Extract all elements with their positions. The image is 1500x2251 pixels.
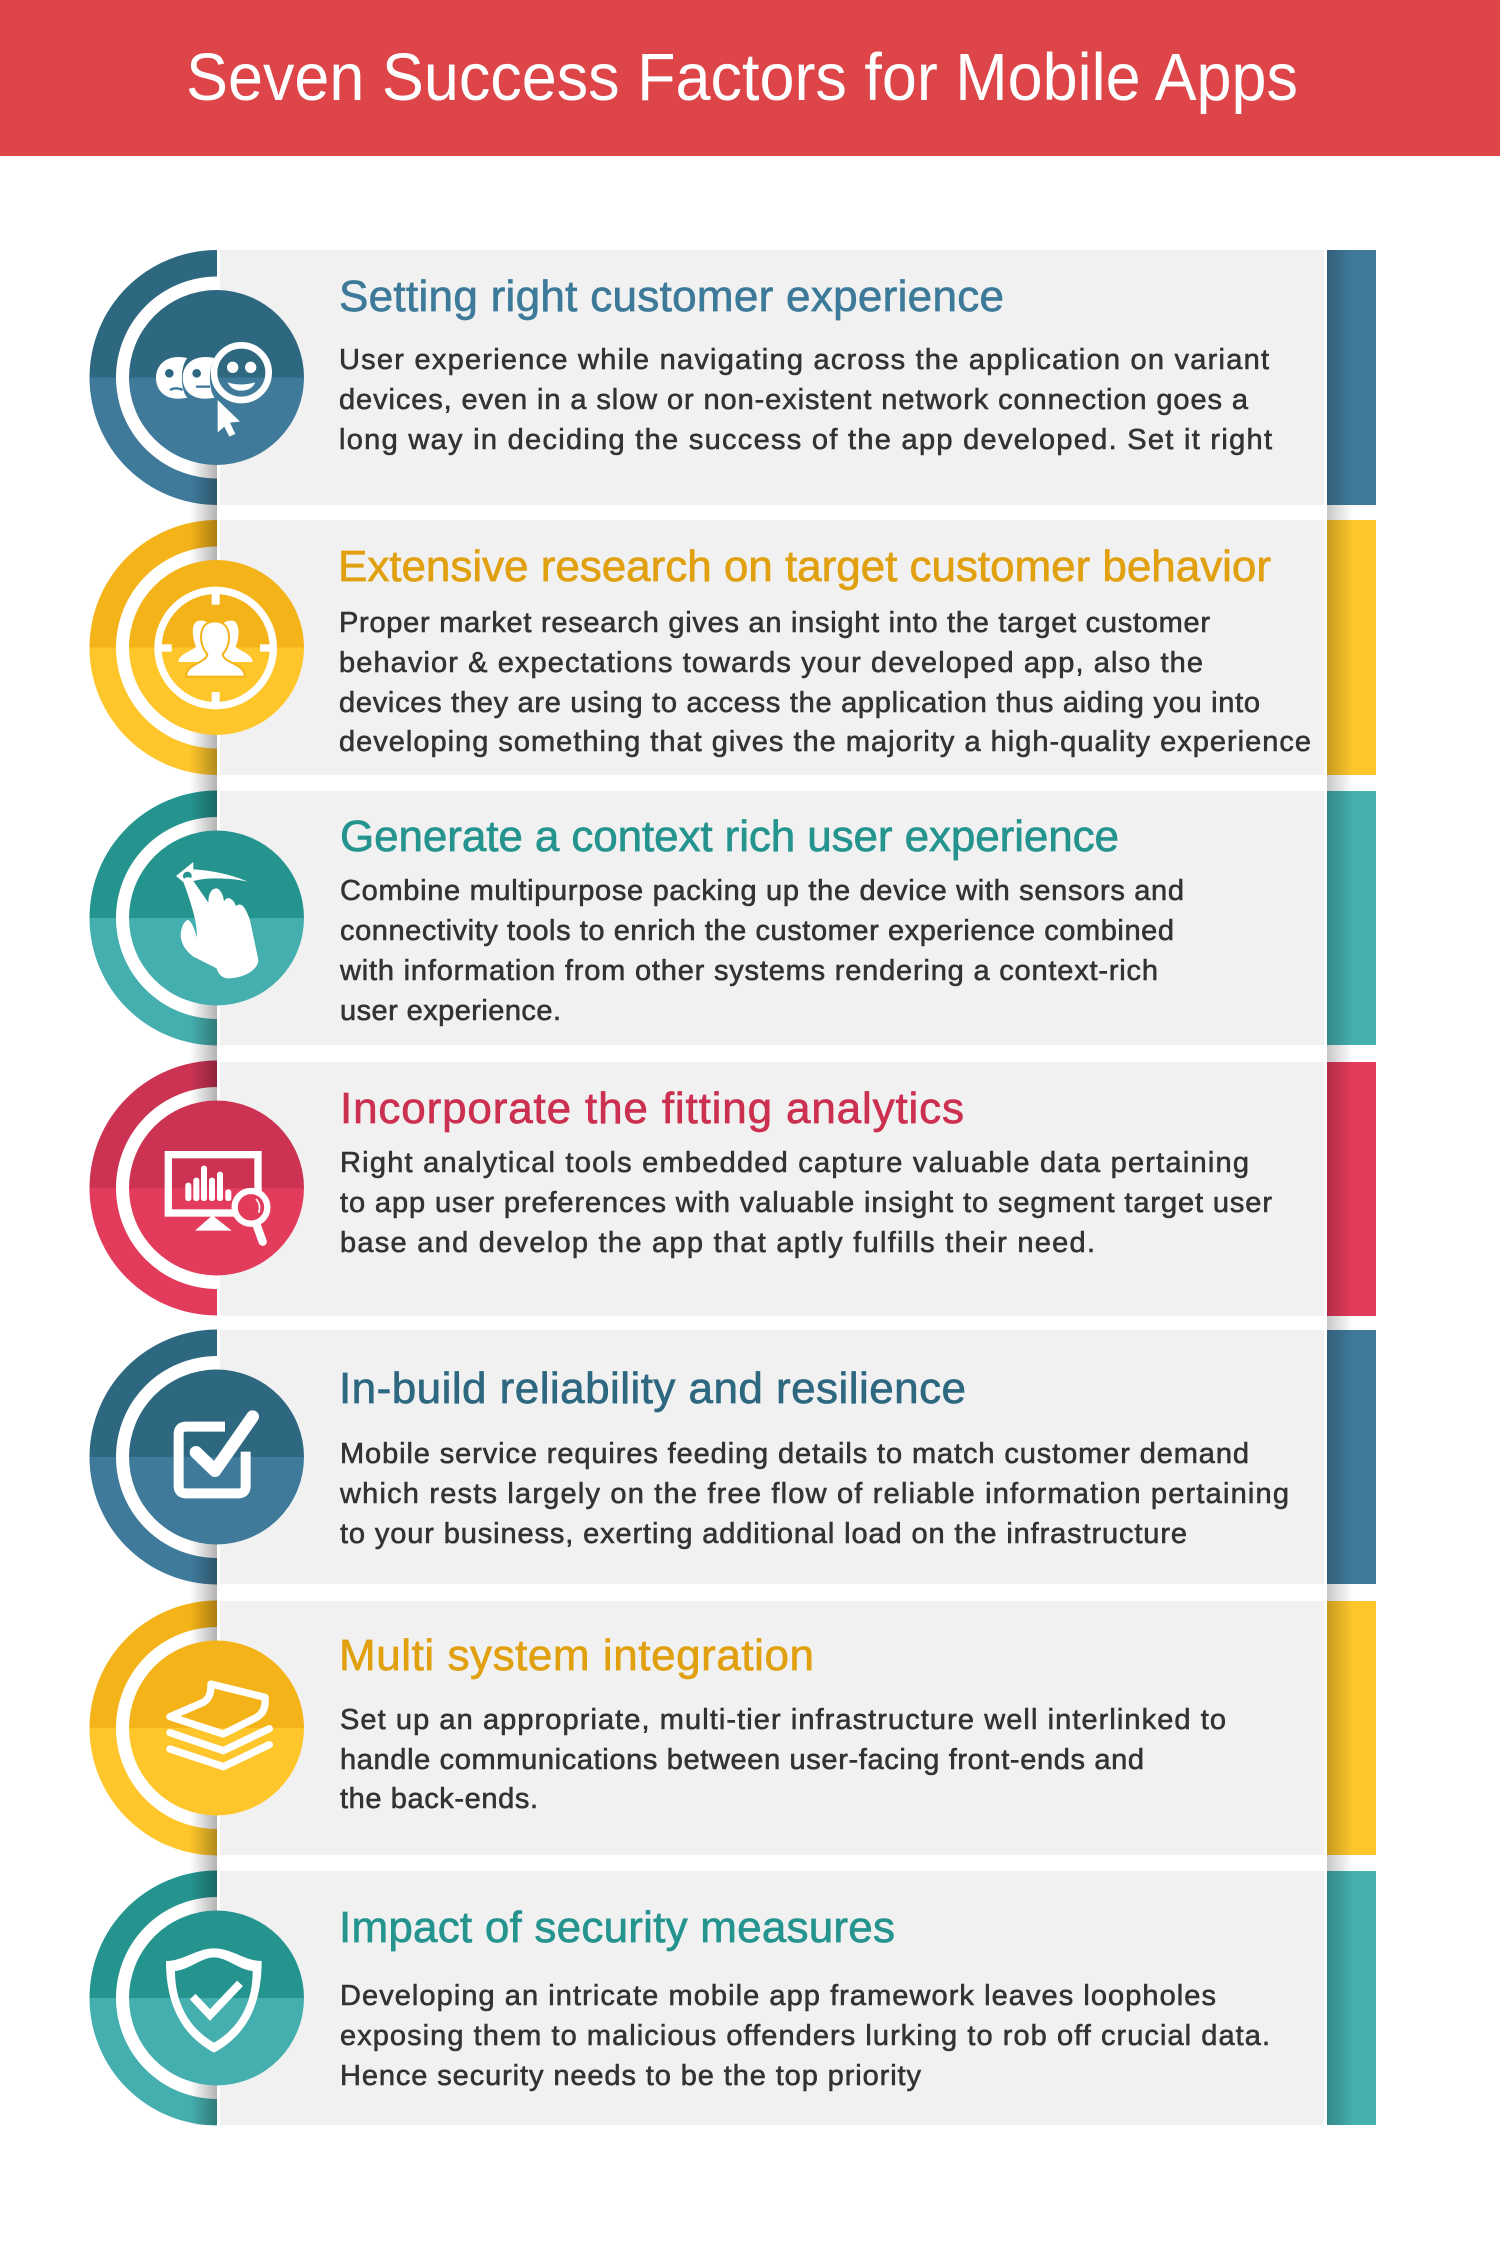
heading: Impact of security measures (339, 1903, 895, 1952)
accent bar (1327, 1062, 1376, 1316)
description: Right analytical tools embedded capture valuable data pertaining (340, 1147, 1249, 1179)
ring (90, 1870, 217, 2126)
icon: swipe hand (129, 831, 304, 1005)
description: User experience while navigating across the application on variant (339, 344, 1269, 376)
description: connectivity tools to enrich the customer experience combined (340, 915, 1174, 947)
title: Seven Success Factors for Mobile Apps (186, 40, 1298, 115)
description: base and develop the app that aptly fulfills their need. (340, 1227, 1095, 1259)
accent bar (1327, 791, 1376, 1045)
description: which rests largely on the free flow of reliable information pertaining (339, 1478, 1289, 1510)
heading: Incorporate the fitting analytics (340, 1084, 964, 1133)
panel: reliability and resilience (90, 1330, 1376, 1584)
ring (90, 1060, 217, 1316)
heading: Extensive research on target customer behavior (338, 542, 1271, 591)
icon: analytics monitor (129, 1101, 304, 1275)
description: developing something that gives the majority a high-quality experience (339, 726, 1311, 758)
description: devices, even in a slow or non-existent network connection goes a (339, 384, 1249, 416)
panel: security measures (90, 1870, 1376, 2126)
ring (90, 790, 217, 1046)
panel: context rich experience (90, 790, 1376, 1046)
description: Mobile service requires feeding details to match customer demand (340, 1438, 1249, 1470)
description (339, 1438, 1289, 1550)
accent bar (1327, 1871, 1376, 2125)
description: to app user preferences with valuable insight to segment target user (340, 1187, 1272, 1219)
accent bar (1327, 250, 1376, 505)
heading: Setting right customer experience (339, 272, 1004, 321)
description: handle communications between user-facing front-ends and (340, 1744, 1144, 1776)
description: long way in deciding the success of the app developed. Set it right (339, 424, 1272, 456)
description: devices they are using to access the application thus aiding you into (339, 687, 1260, 719)
description: with information from other systems rendering a context-rich (339, 955, 1158, 987)
ring (90, 1600, 217, 1856)
ring (90, 1330, 217, 1584)
description (339, 607, 1311, 758)
heading: Generate a context rich user experience (340, 812, 1119, 861)
description: user experience. (340, 995, 561, 1027)
heading: In-build reliability and resilience (339, 1364, 966, 1413)
icon: smiley faces and cursor (129, 290, 304, 465)
heading: Multi system integration (339, 1631, 814, 1680)
description (340, 1980, 1270, 2092)
icon: target audience (129, 560, 304, 735)
panel: multi system integration (90, 1600, 1376, 1856)
panel: setting right customer experience (90, 250, 1376, 505)
accent bar (1327, 520, 1376, 775)
accent bar (1327, 1330, 1376, 1584)
description: Set up an appropriate, multi-tier infrastructure well interlinked to (340, 1704, 1226, 1736)
accent bar (1327, 1601, 1376, 1855)
icon: security shield (129, 1911, 304, 2085)
description (339, 875, 1184, 1027)
description: Hence security needs to be the top priority (340, 2060, 922, 2092)
icon: layered stack (129, 1641, 304, 1815)
ring (90, 250, 217, 505)
description (340, 1147, 1272, 1259)
icon: checkbox (129, 1370, 304, 1544)
panel: extensive research (90, 520, 1376, 775)
panel: fitting analytics (90, 1060, 1376, 1316)
ring (90, 520, 217, 775)
header banner (0, 0, 1500, 156)
description: the back-ends. (340, 1783, 538, 1815)
description: Developing an intricate mobile app framework leaves loopholes (340, 1980, 1216, 2012)
description (339, 344, 1272, 456)
description: Combine multipurpose packing up the device with sensors and (340, 875, 1184, 907)
description: behavior & expectations towards your developed app, also the (339, 647, 1203, 679)
description: to your business, exerting additional load on the infrastructure (340, 1518, 1187, 1550)
description: Proper market research gives an insight into the target customer (339, 607, 1210, 639)
description: exposing them to malicious offenders lurking to rob off crucial data. (340, 2020, 1270, 2052)
description (340, 1704, 1226, 1815)
